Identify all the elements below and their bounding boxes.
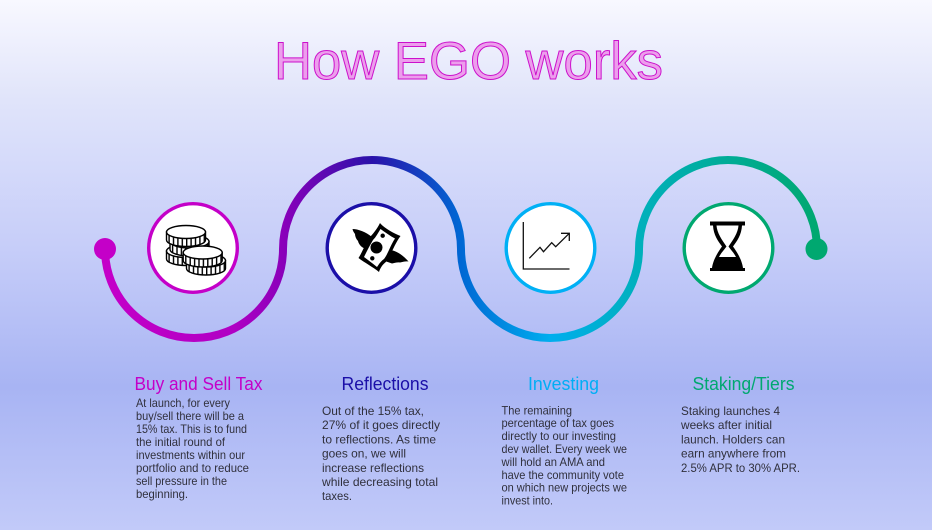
icon: flying money in white circle <box>327 204 416 292</box>
text: Staking/Tiers description: launch. Holders can <box>681 432 785 446</box>
title: How EGO works <box>274 32 663 91</box>
heading: Staking/Tiers: Staking/Tiers <box>692 374 794 394</box>
step 3: Investing <box>501 374 627 508</box>
text: Buy and Sell Tax description <box>136 397 249 501</box>
text: Staking/Tiers description: 2.5% APR to 30% APR. <box>681 461 800 475</box>
text: Buy and Sell Tax description: investments within our <box>136 449 245 462</box>
heading: Investing: Investing <box>528 374 599 394</box>
text: Buy and Sell Tax description: 15% tax. This is to fund <box>136 423 247 436</box>
text: Staking/Tiers description: earn anywhere from <box>681 447 786 461</box>
text: Reflections description: Out of the 15% tax, <box>322 404 424 418</box>
text: Investing description: invest into. <box>502 495 553 508</box>
text: Investing description: directly to our investing <box>502 430 616 443</box>
text: Buy and Sell Tax description: buy/sell there will be a <box>136 410 245 423</box>
text: Buy and Sell Tax description: At launch, for every <box>136 397 230 410</box>
text: Investing description: percentage of tax goes <box>502 417 614 430</box>
text: Buy and Sell Tax description: sell pressure in the <box>136 475 227 488</box>
step 2: Reflections <box>321 374 440 503</box>
step 4: Staking/Tiers <box>680 374 800 475</box>
text: Buy and Sell Tax description: beginning. <box>136 488 188 501</box>
text: Staking/Tiers description: weeks after initial <box>680 418 772 432</box>
text: Investing description: will hold an AMA and <box>501 456 605 469</box>
text: Reflections description: increase reflections <box>322 461 424 475</box>
heading: Reflections: Reflections <box>342 374 428 394</box>
text: Investing description <box>501 404 627 508</box>
text: Investing description: have the community vote <box>502 469 624 482</box>
text: Reflections description: goes on, we will <box>322 447 406 461</box>
text: Reflections description: 27% of it goes directly <box>322 418 440 432</box>
heading: Buy and Sell Tax: Buy and Sell Tax <box>134 374 262 394</box>
text: Investing description: dev wallet. Every week we <box>502 443 627 456</box>
text: Investing description: The remaining <box>502 404 572 417</box>
text: Investing description: on which new projects we <box>502 482 627 495</box>
text: Reflections description: taxes. <box>322 489 352 503</box>
text: Staking/Tiers description <box>680 404 800 475</box>
text: Reflections description: while decreasing total <box>321 475 438 489</box>
icon: coins in white circle <box>149 204 237 292</box>
text: Reflections description <box>321 404 440 503</box>
text: Buy and Sell Tax description: portfolio and to reduce <box>136 462 249 475</box>
winding timeline path <box>94 160 828 338</box>
text: Reflections description: to reflections. As time <box>322 432 436 446</box>
icon: rising line chart in white circle <box>506 204 595 292</box>
text: Staking/Tiers description: Staking launches 4 <box>681 404 780 418</box>
step 1: Buy and Sell Tax <box>134 374 262 501</box>
text: Buy and Sell Tax description: the initial round of <box>136 436 226 449</box>
icon: hourglass in white circle <box>684 204 773 292</box>
